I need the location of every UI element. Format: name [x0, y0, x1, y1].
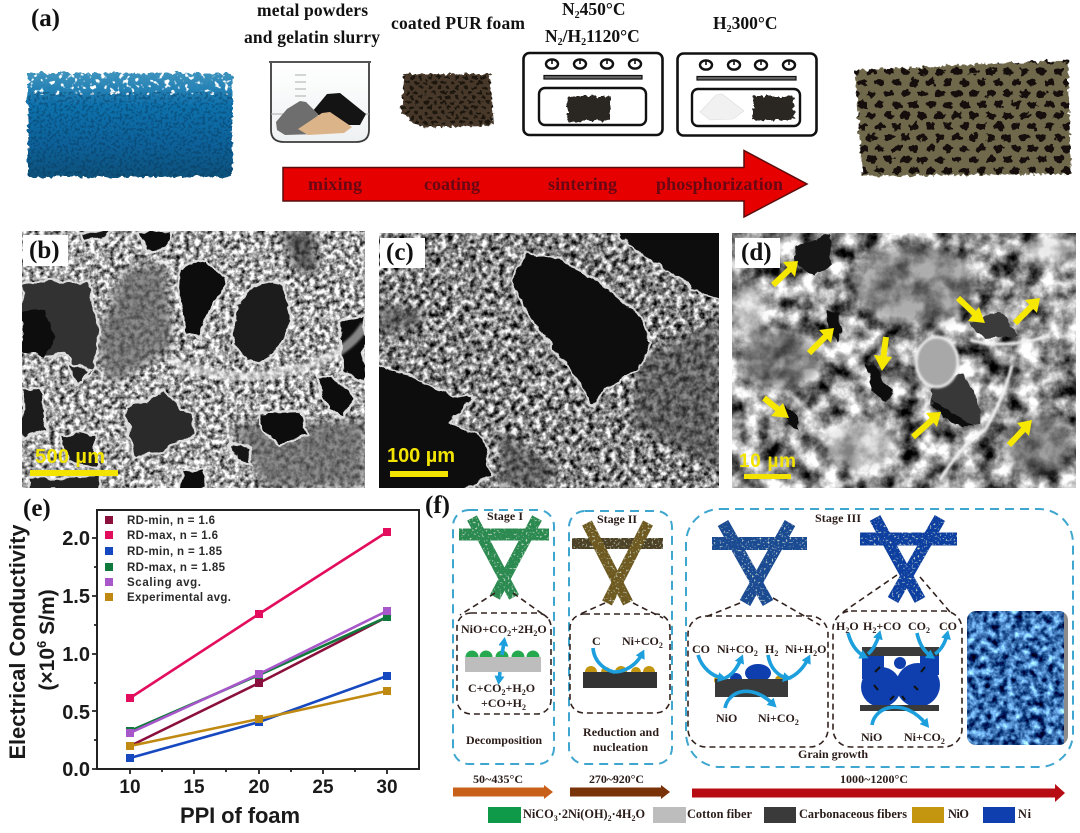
- arrow: process flow: sintering: [548, 174, 617, 194]
- y axis tick labels: 0.0: [62, 759, 90, 781]
- x axis tick labels: [119, 777, 398, 798]
- chart legend: RD-max, n = 1.6: [127, 530, 218, 542]
- x axis tick labels: 30: [376, 777, 398, 798]
- legend: material key: 2: [608, 814, 612, 823]
- callout: Ni grain coalescence: H: [863, 619, 872, 633]
- callout: decomposition: [457, 593, 551, 714]
- callout: Ni nucleation and growth: CO: [692, 642, 710, 656]
- panel: SEM image (b): [22, 231, 365, 490]
- fibers: NiO coated: [572, 523, 663, 603]
- chart legend: Scaling avg.: [127, 577, 201, 589]
- panel: Stage III: Stage III: [815, 511, 861, 525]
- temperature arrow: 1000~1200°C: [692, 772, 1065, 802]
- caption: metal powders and gelatin slurry: metal powders: [257, 0, 368, 20]
- y axis tick labels: 1.5: [62, 586, 90, 608]
- temperature arrow: 270~920°C: 270~920°C: [589, 772, 644, 786]
- x axis title: PPI of foam: [180, 803, 300, 828]
- panel: Stage III: [686, 509, 1073, 767]
- callout: Ni grain coalescence: CO: [939, 619, 957, 633]
- callout: Ni grain coalescence: CO: [908, 619, 926, 633]
- legend: material key: Ni: [1018, 807, 1032, 821]
- callout: decomposition: NiO+CO: [461, 622, 507, 636]
- callout: decomposition: 2: [502, 688, 506, 697]
- series: RD-min, n = 1.85: [126, 672, 391, 762]
- temperature arrow: 270~920°C: [570, 772, 670, 799]
- callout: Ni nucleation and growth: 2: [774, 649, 778, 658]
- legend: material key: 2: [631, 814, 635, 823]
- callout: decomposition: 2: [533, 629, 537, 638]
- fibers: precursor coated: [459, 518, 549, 597]
- chart legend: Experimental avg.: [127, 592, 231, 604]
- caption: sintering conditions: [545, 0, 640, 48]
- icon: beaker with powders: [269, 62, 371, 142]
- callout: Ni grain coalescence: 2: [941, 737, 945, 746]
- yellow arrows marking pores: [764, 261, 1040, 445]
- arrow: process flow: mixing: [308, 174, 362, 194]
- caption: sintering conditions: 2: [581, 37, 586, 48]
- callout: decomposition: O: [537, 622, 547, 636]
- y axis tick labels: 1.0: [62, 644, 90, 666]
- shaded wall regions: [95, 231, 365, 488]
- panel label: (a): (a): [31, 5, 60, 32]
- image: blue SEM of nickel: [967, 611, 1068, 745]
- caption: sintering conditions: 1120°C: [586, 26, 640, 46]
- caption: phosphorization condition: H: [713, 13, 727, 33]
- scale bar: 100 µm: [387, 445, 455, 477]
- callout: Ni nucleation and growth: NiO: [716, 711, 737, 725]
- panel: Stage I: Decomposition: [466, 733, 542, 747]
- legend: material key: [488, 807, 1032, 823]
- callout: Ni grain coalescence: [833, 575, 962, 747]
- panel label: (e): (e): [23, 495, 51, 522]
- panel: Stage II: Stage II: [597, 512, 637, 526]
- callout: reduction: C: [592, 634, 601, 648]
- scale bar: 500 µm: 500 µm: [35, 446, 105, 468]
- legend: material key: Carbonaceous fibers: [799, 807, 907, 821]
- callout: Ni grain coalescence: H: [836, 619, 845, 633]
- callout: Ni grain coalescence: NiO: [861, 730, 882, 744]
- callout: decomposition: +CO+H: [481, 696, 522, 710]
- temperature arrow: 50~435°C: 50~435°C: [473, 772, 523, 786]
- panel label: (c): [380, 238, 425, 268]
- callout: Ni nucleation and growth: 2: [754, 649, 758, 658]
- photo: blue PUR foam: [28, 69, 232, 177]
- caption: sintering conditions: N: [545, 26, 558, 46]
- scale bar: 100 µm: 100 µm: [387, 445, 455, 467]
- callout: reduction: 2: [659, 641, 663, 650]
- callout: decomposition: O: [526, 681, 535, 695]
- callout: decomposition: 2: [522, 688, 526, 697]
- callout: Ni nucleation and growth: Ni+CO: [758, 711, 795, 725]
- caption: coated PUR foam: coated PUR foam: [391, 13, 525, 33]
- chart legend: RD-min, n = 1.6: [127, 515, 215, 527]
- panel: Stage II: Reduction and: [583, 725, 659, 739]
- pores: [785, 235, 1018, 432]
- callout: decomposition: C+CO: [468, 681, 502, 695]
- legend: material key: NiCO: [523, 807, 554, 821]
- legend: material key: NiO: [948, 807, 969, 821]
- icon: sintering furnace: [524, 53, 662, 135]
- y axis title: S/m): [36, 589, 59, 641]
- series: Experimental avg.: [126, 687, 391, 750]
- y axis tick labels: [62, 528, 90, 781]
- y axis title: Electrical Conductivity: [5, 524, 30, 760]
- chart legend: RD-min, n = 1.85: [127, 546, 223, 558]
- panel: Stage II: nucleation: [593, 740, 648, 754]
- y axis title: [5, 524, 59, 760]
- legend: material key: ·2Ni(OH): [558, 807, 608, 821]
- panel label: (b): [23, 235, 68, 266]
- fibers: late Ni growth: [860, 518, 957, 600]
- legend: material key: O: [635, 807, 645, 821]
- bright grain: [916, 337, 958, 387]
- panel: Stage I: Stage I: [487, 509, 523, 523]
- panel label: (f): (f): [425, 492, 450, 519]
- callout: Ni grain coalescence: 2: [926, 626, 930, 635]
- callout: Ni nucleation and growth: 2: [813, 649, 817, 658]
- scale bar: 10 µm: 10 µm: [739, 451, 796, 472]
- arrow: process flow: coating: [424, 174, 480, 194]
- callout: Ni grain coalescence: 2: [872, 626, 876, 635]
- series: RD-max, n = 1.85: [126, 613, 391, 735]
- photo: coated PUR foam: [401, 74, 494, 128]
- caption: sintering conditions: 2: [558, 37, 563, 48]
- shaded wall regions: [379, 305, 719, 488]
- series: Scaling avg.: [126, 607, 391, 737]
- line chart: electrical conductivity vs PPI: [5, 510, 419, 828]
- chart legend: [105, 515, 231, 604]
- caption: sintering conditions: 2: [575, 10, 580, 21]
- callout: reduction: [570, 603, 670, 713]
- dark pores: [375, 229, 725, 492]
- fibers: early Ni growth: [712, 523, 807, 603]
- icon: phosphorization furnace: [678, 54, 816, 136]
- chart legend: RD-max, n = 1.85: [127, 562, 226, 574]
- x axis tick labels: 20: [248, 777, 270, 798]
- callout: Ni nucleation and growth: [688, 598, 828, 747]
- x axis tick labels: 25: [312, 777, 334, 798]
- callout: Ni nucleation and growth: Ni+H: [785, 642, 813, 656]
- caption: phosphorization condition: 2: [727, 24, 732, 35]
- x axis tick labels: 15: [183, 777, 205, 798]
- caption: metal powders and gelatin slurry: and gelatin slurry: [244, 27, 380, 47]
- panel: Stage III: Grain growth: [798, 747, 868, 761]
- callout: Ni nucleation and growth: 2: [795, 718, 799, 727]
- callout: Ni nucleation and growth: Ni+CO: [717, 642, 754, 656]
- callout: decomposition: +H: [506, 681, 522, 695]
- callout: decomposition: 2: [507, 629, 511, 638]
- callout: reduction: Ni+CO: [622, 634, 659, 648]
- legend: material key: Cotton fiber: [687, 807, 753, 821]
- callout: Ni grain coalescence: 2: [845, 626, 849, 635]
- panel: SEM image (d): [732, 233, 1076, 488]
- arrow: process flow: [283, 150, 807, 217]
- bright ridges: [940, 335, 1050, 480]
- panel label: (d): [735, 238, 780, 268]
- series: RD-max, n = 1.6: [126, 528, 391, 702]
- caption: metal powders and gelatin slurry: [244, 0, 380, 47]
- bright ridge: [170, 325, 365, 376]
- series: RD-min, n = 1.6: [126, 613, 391, 750]
- arrow: process flow: phosphorization: [656, 174, 783, 194]
- surface grains: [732, 236, 1075, 475]
- callout: decomposition: +2H: [511, 622, 534, 636]
- scale bar: 500 µm: [30, 446, 118, 476]
- panel label: (c): (c): [386, 239, 414, 266]
- panel: SEM image (c): [375, 229, 725, 492]
- dark pores: [22, 231, 365, 490]
- callout: Ni nucleation and growth: O: [817, 642, 827, 656]
- y axis tick labels: 2.0: [62, 528, 90, 550]
- caption: phosphorization condition: 300°C: [732, 13, 778, 33]
- callout: decomposition: 2: [522, 703, 526, 712]
- legend: material key: ·4H: [612, 807, 632, 821]
- photo: final metal foam: [855, 60, 1071, 176]
- callout: Ni grain coalescence: Ni+CO: [904, 730, 941, 744]
- y axis tick labels: 0.5: [62, 702, 90, 724]
- callout: Ni grain coalescence: O: [849, 619, 859, 633]
- y axis title: (×10: [36, 648, 59, 691]
- panel: Stage I: [453, 509, 554, 764]
- legend: material key: 3: [554, 814, 558, 823]
- temperature arrow: 50~435°C: [453, 772, 553, 799]
- temperature arrow: 1000~1200°C: 1000~1200°C: [840, 772, 908, 786]
- callout: Ni nucleation and growth: H: [765, 642, 774, 656]
- y axis title: 6: [34, 641, 49, 648]
- panel label: (d): (d): [741, 239, 772, 266]
- x axis tick labels: 10: [119, 777, 141, 798]
- panel label: (b): (b): [29, 237, 60, 264]
- panel: Stage II: [569, 511, 672, 764]
- caption: sintering conditions: /H: [562, 26, 582, 46]
- callout: Ni grain coalescence: +CO: [876, 619, 901, 633]
